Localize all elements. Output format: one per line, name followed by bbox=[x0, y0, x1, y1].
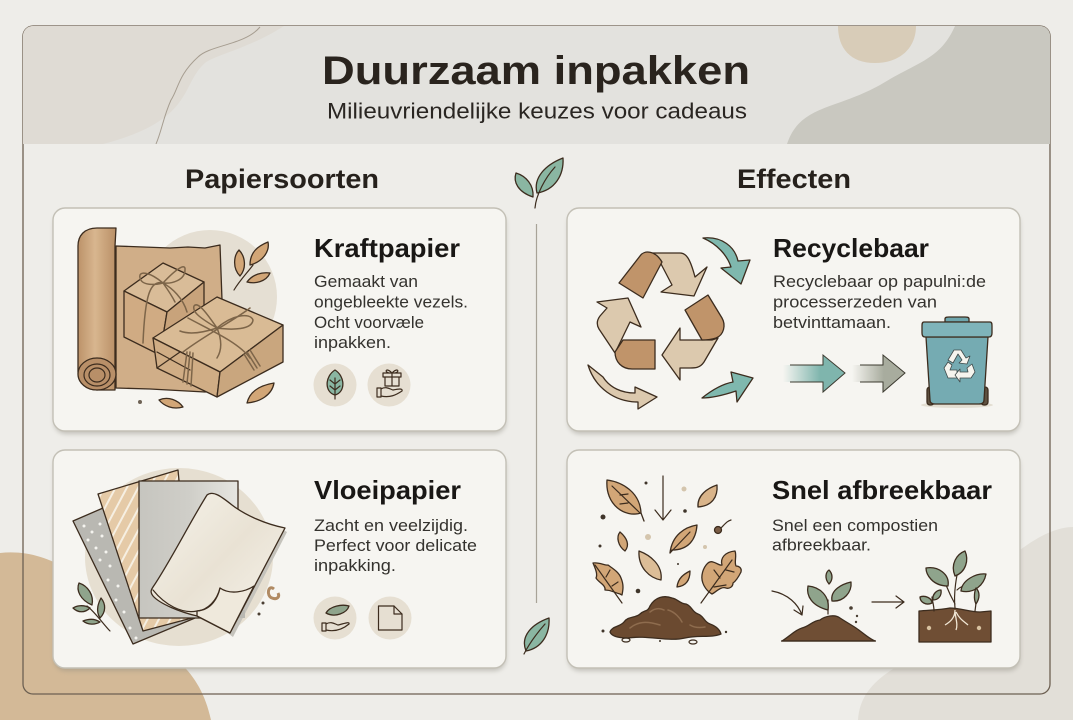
icon: hand with leaf badge bbox=[314, 596, 356, 640]
header band bbox=[23, 26, 1050, 144]
illustration: kraft paper and gifts bbox=[78, 228, 283, 408]
body: recyclebaar: betvinttamaan. bbox=[773, 314, 891, 332]
icon: recycle bin bbox=[921, 317, 993, 408]
icon: paper badge bbox=[368, 596, 412, 640]
body: vloeipapier: Zacht en veelzijdig. bbox=[314, 517, 468, 535]
arrow: gradient teal bbox=[783, 355, 845, 392]
body: kraftpapier: inpakken. bbox=[314, 334, 391, 352]
icon: bottom leaf bbox=[524, 618, 549, 654]
body: kraftpapier bbox=[314, 273, 468, 352]
background blob: grey bottom right bbox=[858, 527, 1073, 720]
title: Duurzaam inpakken bbox=[322, 49, 750, 93]
illustration: recycle symbol bbox=[597, 252, 724, 380]
arrow: curved into seedling bbox=[772, 591, 803, 615]
icon: top leaf bbox=[515, 158, 563, 208]
body: recyclebaar bbox=[773, 273, 986, 332]
illustration: grown plant in soil bbox=[919, 551, 991, 642]
body: recyclebaar: processerzeden van bbox=[773, 294, 937, 312]
illustration: seedling mound bbox=[781, 570, 876, 641]
subtitle: Milieuvriendelijke keuzes voor cadeaus bbox=[327, 98, 747, 124]
text: kraftpapier: Kraftpapier bbox=[314, 233, 460, 263]
body: snel afbreekbaar: Snel een compostien bbox=[772, 517, 938, 535]
text: recyclebaar: Recyclebaar bbox=[773, 233, 929, 263]
center divider bbox=[536, 224, 538, 603]
illustration: paper sheets bbox=[73, 468, 287, 646]
body: recyclebaar: Recyclebaar op papulni:de bbox=[773, 273, 986, 291]
body: vloeipapier bbox=[314, 517, 477, 575]
panel: vloeipapier bbox=[53, 450, 506, 671]
panel: kraftpapier bbox=[53, 208, 506, 434]
arrow: teal top bbox=[703, 238, 750, 284]
heading: effecten: Effecten bbox=[737, 164, 851, 194]
background blob: tan bottom left bbox=[0, 552, 211, 720]
text: vloeipapier: Vloeipapier bbox=[314, 475, 461, 505]
body: snel afbreekbaar: afbreekbaar. bbox=[772, 536, 871, 554]
icon: leaf badge bbox=[314, 364, 356, 406]
body: snel afbreekbaar bbox=[772, 517, 938, 554]
body: vloeipapier: Perfect voor delicate bbox=[314, 537, 477, 555]
arrow: beige bottom bbox=[588, 365, 657, 409]
panel: recyclebaar bbox=[567, 208, 1020, 434]
body: kraftpapier: Gemaakt van bbox=[314, 273, 418, 291]
arrow: straight bbox=[872, 596, 904, 608]
arrow: gradient grey bbox=[852, 355, 905, 392]
panel: snel afbreekbaar bbox=[567, 450, 1020, 671]
body: kraftpapier: ongebleekte vezels. bbox=[314, 294, 468, 312]
arrow: teal bottom bbox=[702, 372, 753, 402]
icon: gift badge bbox=[368, 364, 410, 406]
heading: papiersoorten: Papiersoorten bbox=[185, 164, 379, 194]
text: snel afbreekbaar: Snel afbreekbaar bbox=[772, 475, 992, 505]
illustration: falling leaves and soil bbox=[593, 476, 741, 644]
body: kraftpapier: Ocht voorvæle bbox=[314, 314, 424, 332]
body: vloeipapier: inpakking. bbox=[314, 557, 396, 575]
